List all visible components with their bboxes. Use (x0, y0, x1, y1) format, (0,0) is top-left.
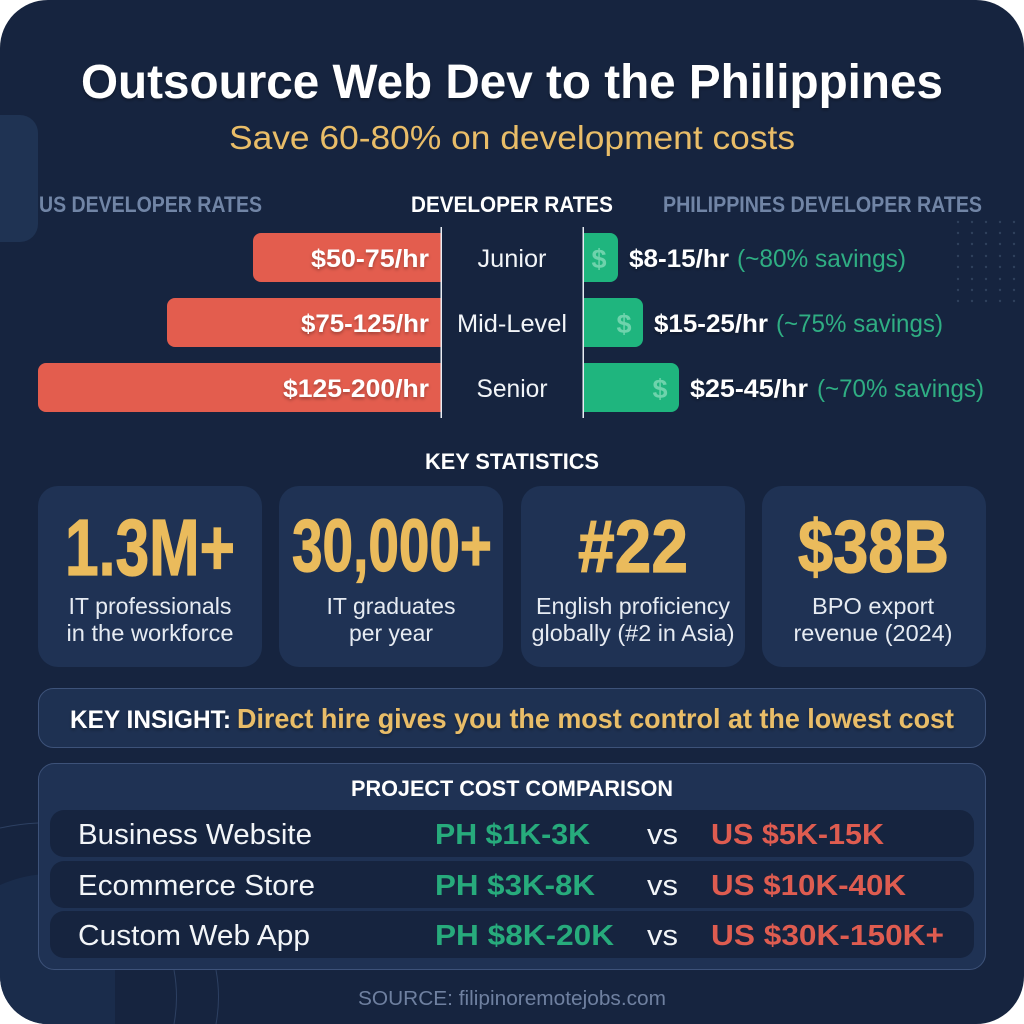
stat card: English proficiency (521, 486, 745, 667)
callout: key insight: KEY INSIGHT: (70, 706, 231, 734)
PH bar: junior: $8-15/hr (629, 245, 729, 273)
title: Outsource Web Dev to the Philippines (81, 56, 943, 109)
stat card: IT graduates: 30,000+ (292, 504, 492, 587)
PH bar: junior: $ (591, 244, 607, 274)
level label: mid-level: Mid-Level (457, 310, 567, 338)
stat card: IT professionals: in the workforce (66, 620, 234, 646)
row: custom web app: Custom Web App (78, 920, 310, 952)
stat card: IT professionals (38, 486, 262, 667)
row: custom web app: vs (647, 920, 678, 952)
row: ecommerce store: PH $3K-8K (435, 870, 595, 902)
callout: key insight (38, 688, 986, 748)
PH bar: mid-level (584, 298, 943, 347)
stat card: BPO revenue: BPO export (812, 593, 935, 619)
PH bar: mid-level: $15-25/hr (654, 310, 768, 338)
subtitle: Save 60-80% on development costs (229, 119, 795, 156)
PH bar: mid-level: $ (616, 309, 632, 339)
row: business website: vs (647, 819, 678, 851)
level label: junior: Junior (478, 245, 546, 273)
stat card: BPO revenue: revenue (2024) (794, 620, 952, 646)
PH bar: senior: (~70% savings) (817, 375, 984, 403)
row: ecommerce store (50, 861, 974, 908)
US bar: junior (253, 233, 441, 282)
stat card: IT professionals: 1.3M+ (65, 503, 235, 592)
stat card: English proficiency: #22 (578, 505, 688, 588)
row: custom web app: PH $8K-20K (435, 920, 614, 952)
stat card: BPO revenue: $38B (798, 505, 949, 588)
stat card: IT graduates: IT graduates (326, 593, 456, 619)
heading: US developer rates: US DEVELOPER RATES (39, 192, 262, 217)
heading: developer rates: DEVELOPER RATES (411, 192, 613, 217)
PH bar: senior: $ (652, 374, 668, 404)
chart: developer rates comparison (38, 192, 984, 418)
US bar: mid-level (167, 298, 441, 347)
heading: key statistics: KEY STATISTICS (425, 449, 599, 474)
stat card: IT professionals: IT professionals (68, 593, 232, 619)
panel: project cost comparison (38, 764, 986, 970)
row: business website: US $5K-15K (711, 819, 884, 851)
stat card: English proficiency: English proficiency (536, 593, 731, 619)
US bar: senior (38, 363, 441, 412)
stat card: English proficiency: globally (#2 in Asia) (532, 620, 734, 646)
US bar: senior: $125-200/hr (283, 375, 429, 403)
row: ecommerce store: vs (647, 870, 678, 902)
heading: project cost comparison: PROJECT COST COMPARISON (351, 776, 673, 801)
row: custom web app (50, 911, 974, 958)
stat card: IT graduates: per year (349, 620, 433, 646)
row: ecommerce store: US $10K-40K (711, 870, 906, 902)
stat card: BPO revenue (762, 486, 986, 667)
level label: senior: Senior (476, 375, 548, 403)
row: business website (50, 810, 974, 857)
stat card: IT graduates (279, 486, 503, 667)
PH bar: junior (584, 233, 906, 282)
PH bar: senior (584, 363, 984, 412)
US bar: junior: $50-75/hr (311, 245, 429, 273)
PH bar: senior: $25-45/hr (690, 375, 808, 403)
heading: Philippines developer rates: PHILIPPINES DEVELOPER RATES (663, 192, 982, 217)
US bar: mid-level: $75-125/hr (301, 310, 429, 338)
row: custom web app: US $30K-150K+ (711, 920, 944, 952)
row: ecommerce store: Ecommerce Store (78, 870, 315, 902)
callout: key insight: Direct hire gives you the most control at the lowest cost (237, 703, 954, 734)
row: business website: PH $1K-3K (435, 819, 590, 851)
PH bar: mid-level: (~75% savings) (776, 310, 943, 338)
PH bar: junior: (~80% savings) (737, 245, 906, 273)
source line: SOURCE: filipinoremotejobs.com (358, 988, 666, 1010)
row: business website: Business Website (78, 819, 312, 851)
